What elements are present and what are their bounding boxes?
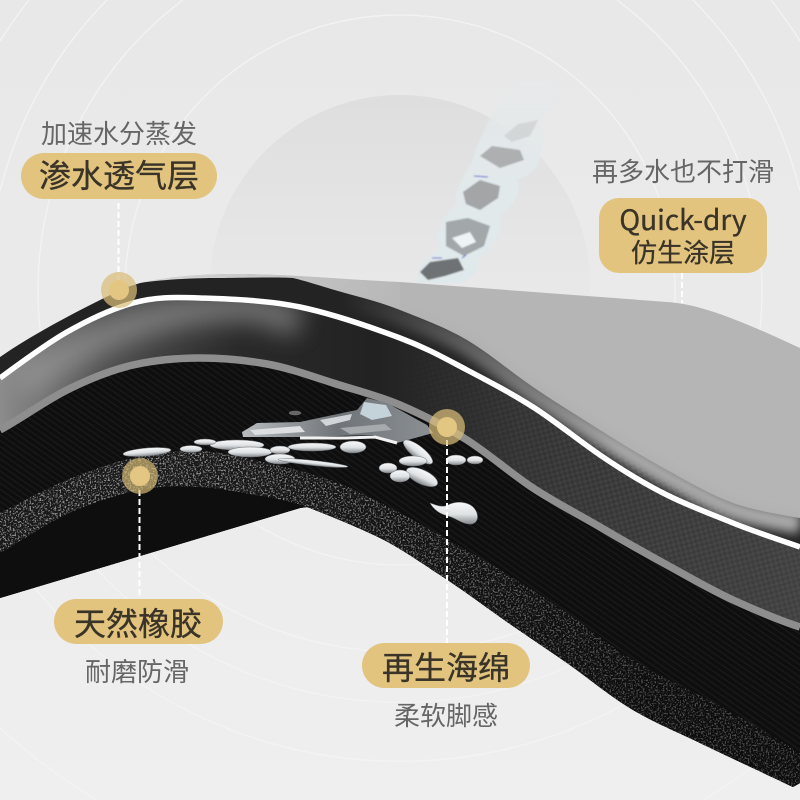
mat cross-section layers: [0, 274, 800, 787]
marker: foam: [429, 409, 465, 445]
callout: recycled foam: 再生海绵: [382, 643, 510, 689]
callout: natural rubber: 天然橡胶: [74, 599, 202, 645]
callout: natural rubber: 耐磨防滑: [85, 652, 189, 689]
callout: quick-dry coating: 仿生涂层: [631, 233, 735, 270]
droplets: [123, 411, 483, 524]
water stream falling on the mat: [418, 60, 563, 283]
callout: quick-dry coating: Quick-dry: [619, 199, 747, 239]
callout: quick-dry coating: 再多水也不打滑: [592, 152, 774, 189]
black rubber layer: [0, 486, 308, 598]
breathable layer body: [0, 298, 800, 800]
dark top band: [0, 278, 800, 800]
callout: recycled foam: 柔软脚感: [394, 696, 498, 733]
grey strip: [0, 358, 800, 627]
callout: breathable layer: 加速水分蒸发: [41, 114, 197, 151]
marker: breathable layer: [101, 272, 137, 308]
black fabric layer: [0, 358, 800, 800]
stream shading: [420, 120, 538, 280]
dashed leader lines: [118, 203, 682, 645]
callout: breathable layer: 渗水透气层: [39, 151, 199, 197]
callout: natural rubber: [54, 599, 223, 689]
water spreading over the fabric: [123, 398, 483, 524]
marker: rubber: [122, 458, 158, 494]
foam layer: [0, 451, 800, 787]
soft glow under white line: [20, 307, 300, 385]
water highlights: [250, 402, 392, 435]
white line: [0, 298, 800, 547]
woven texture of breathable layer: [539, 416, 800, 622]
sliver highlight: [142, 274, 350, 294]
callout: recycled foam: [362, 643, 530, 733]
white stream: [300, 437, 397, 443]
top grey coating surface: [0, 274, 800, 518]
soft highlight along grey edge: [345, 298, 800, 524]
water pool: [242, 398, 433, 443]
stream body: [418, 60, 563, 283]
callout: breathable layer: [21, 114, 217, 199]
callout: quick-dry coating: [592, 152, 774, 273]
